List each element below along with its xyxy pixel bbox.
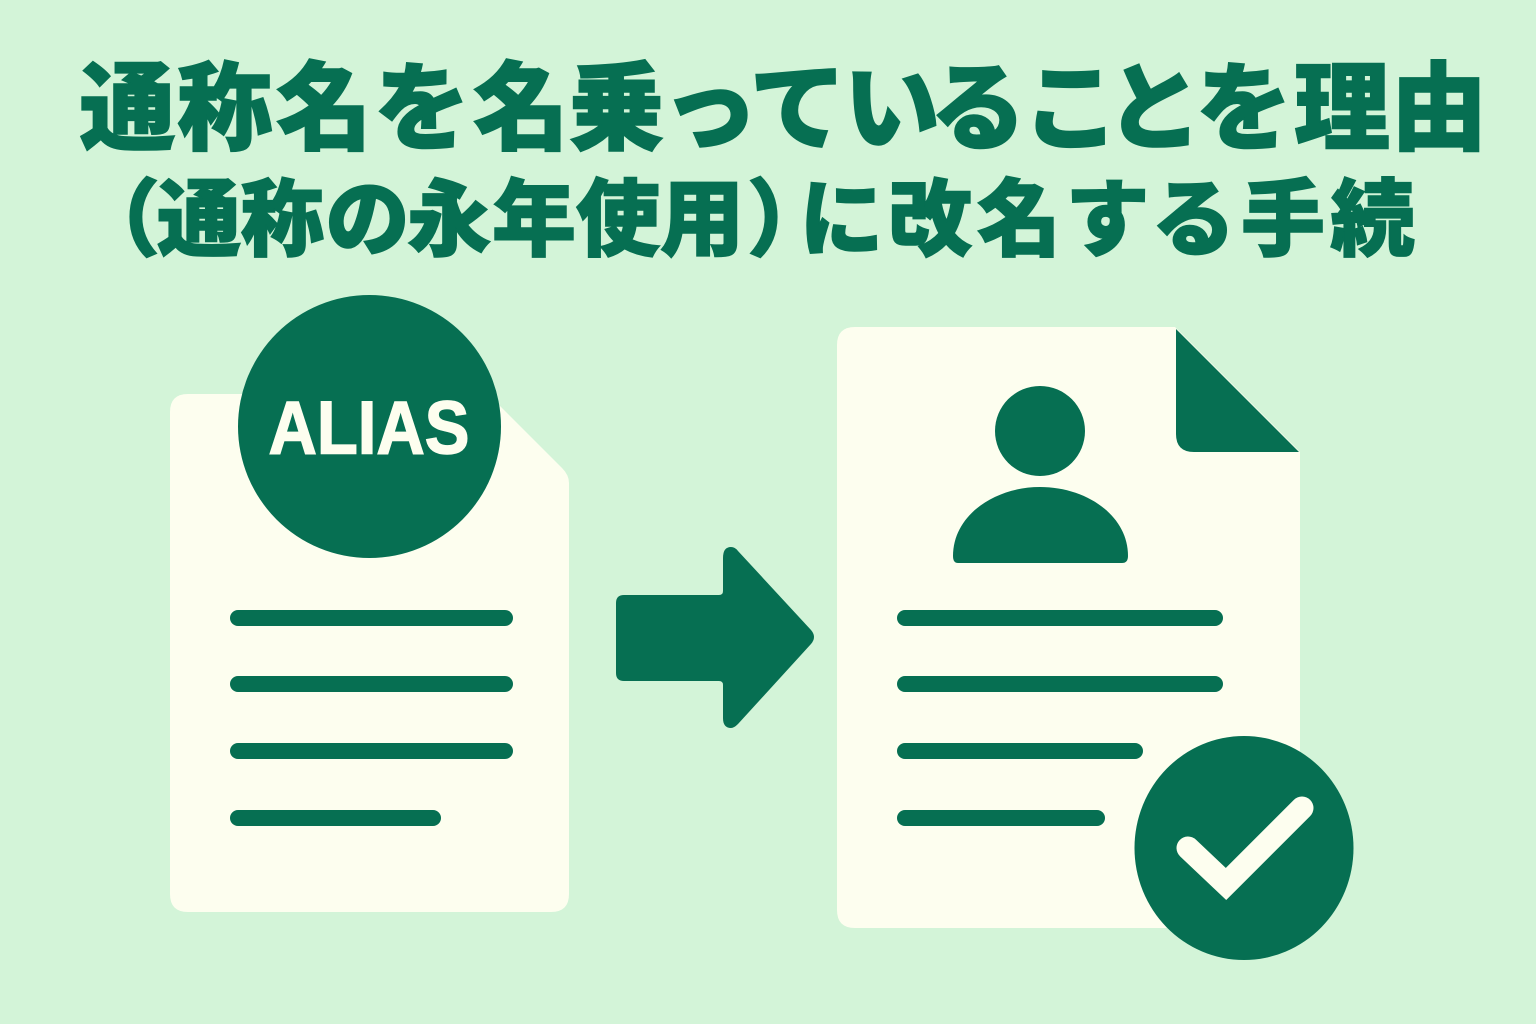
icon: alias badge: ALIAS xyxy=(268,386,470,470)
text lines xyxy=(897,610,1223,826)
icon: alias badge xyxy=(238,295,501,558)
text lines xyxy=(230,610,513,826)
document sheet xyxy=(170,394,569,912)
panel: official document xyxy=(837,327,1354,960)
title: 通称名を名乗っていることを理由 xyxy=(80,56,1487,163)
icon: folded corner xyxy=(1176,329,1299,452)
document sheet xyxy=(837,327,1300,928)
arrow xyxy=(616,547,814,728)
panel: alias document xyxy=(170,295,569,912)
title xyxy=(76,56,1487,267)
icon: check badge xyxy=(1134,736,1354,960)
icon: person xyxy=(953,386,1128,563)
title: （通称の永年使用）に改名する手続 xyxy=(76,173,1415,267)
